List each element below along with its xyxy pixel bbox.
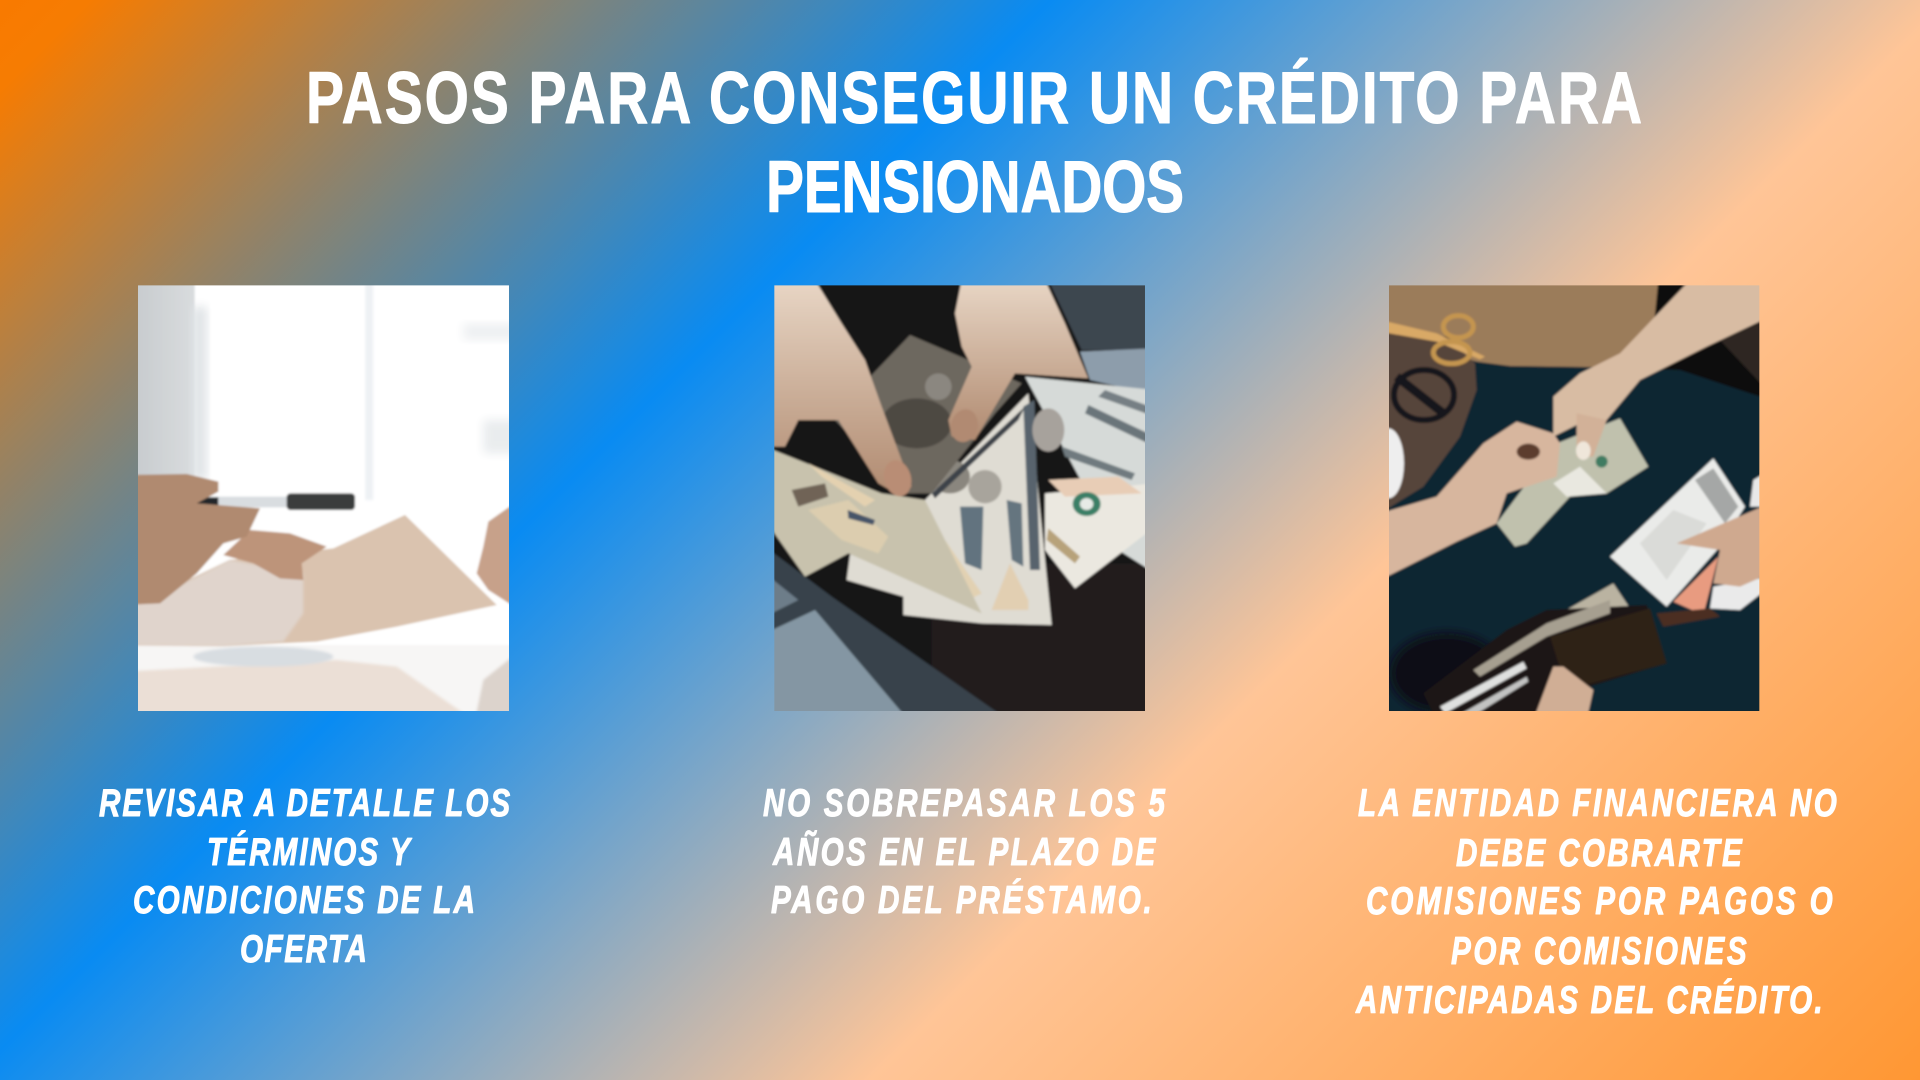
text: step 3: LA ENTIDAD FINANCIERA NO: [1358, 782, 1837, 825]
photo: hands passing a pen over a document: [138, 285, 509, 711]
text: step 2: [763, 782, 1166, 922]
text: step 3: COMISIONES POR PAGOS O: [1366, 880, 1833, 923]
title: [306, 57, 1642, 228]
text: step 3: DEBE COBRARTE: [1456, 832, 1743, 875]
photo: hands fanning dollar bills: [765, 280, 1155, 720]
text: step 2: AÑOS EN EL PLAZO DE: [772, 830, 1156, 874]
text: step 2: PAGO DEL PRÉSTAMO.: [771, 878, 1152, 922]
text: step 3: ANTICIPADAS DEL CRÉDITO.: [1355, 978, 1823, 1022]
text: step 1: OFERTA: [240, 928, 367, 971]
text: step 1: [99, 782, 510, 971]
title: PASOS PARA CONSEGUIR UN CRÉDITO PARA: [306, 57, 1642, 139]
text: step 3: [1355, 782, 1837, 1022]
text: step 1: REVISAR A DETALLE LOS: [99, 782, 510, 825]
text: step 3: POR COMISIONES: [1451, 930, 1747, 973]
title: PENSIONADOS: [766, 146, 1184, 228]
photo: exchanging cash, receipt and wallet: [1373, 280, 1770, 720]
text: step 2: NO SOBREPASAR LOS 5: [763, 782, 1166, 825]
text: step 1: TÉRMINOS Y: [207, 830, 412, 874]
text: step 1: CONDICIONES DE LA: [133, 879, 475, 922]
